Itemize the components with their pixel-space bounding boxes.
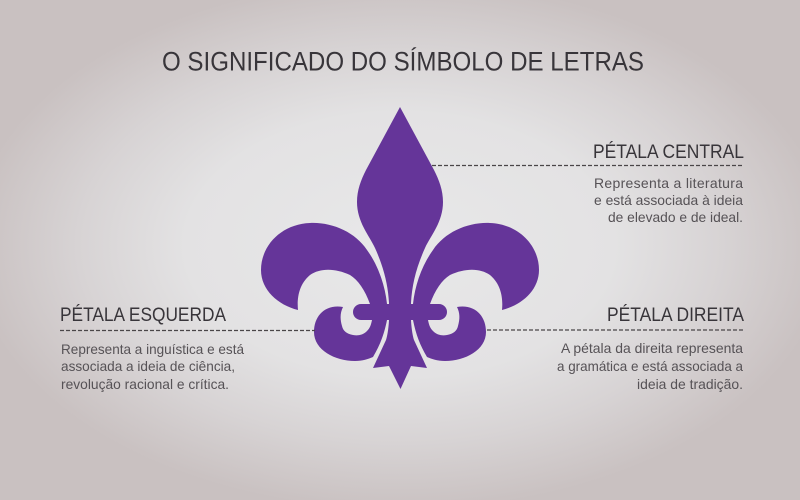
leader line: pétala esquerda	[60, 330, 315, 332]
text block: pétala direita	[557, 340, 743, 392]
panel: pétala central	[432, 140, 744, 225]
panel: pétala direita	[487, 303, 744, 392]
text block: pétala central: de elevado e de ideal.	[608, 209, 743, 225]
text block: pétala direita: ideia de tradição.	[637, 376, 743, 392]
leader line: pétala direita	[487, 329, 743, 331]
text block: pétala esquerda: revolução racional e crítica.	[61, 376, 229, 392]
heading: pétala central: PÉTALA CENTRAL	[593, 140, 744, 163]
heading: pétala direita: PÉTALA DIREITA	[607, 303, 744, 326]
title: O SIGNIFICADO DO SÍMBOLO DE LETRAS	[162, 46, 644, 76]
text block: pétala esquerda: Representa a inguística e está	[61, 341, 244, 357]
text block: pétala direita: A pétala da direita representa	[561, 340, 743, 356]
heading: pétala esquerda: PÉTALA ESQUERDA	[60, 303, 226, 326]
text block: pétala central: Representa a literatura	[594, 175, 743, 191]
text block: pétala direita: a gramática e está associada a	[557, 358, 743, 374]
panel: pétala esquerda	[60, 303, 315, 392]
text block: pétala esquerda: associada a ideia de ciência,	[61, 358, 235, 374]
text block: pétala central: e está associada à ideia	[594, 192, 743, 208]
leader line: pétala central	[432, 164, 743, 166]
text block: pétala central	[594, 175, 743, 225]
icon: purple fleur-de-lis	[261, 107, 539, 389]
text block: pétala esquerda	[61, 341, 244, 392]
